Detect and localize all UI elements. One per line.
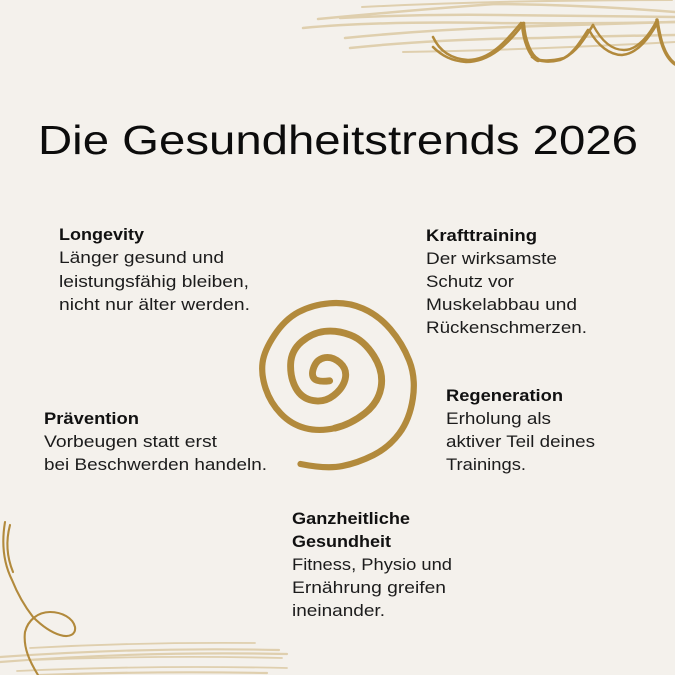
text block: Regeneration: Regeneration	[446, 387, 563, 405]
text block: Krafttraining: Rückenschmerzen.	[426, 319, 587, 337]
text block: Ganzheitliche Gesundheit: ineinander.	[292, 602, 385, 620]
title: Die Gesundheitstrends 2026	[38, 117, 638, 163]
icon: central gold spiral	[262, 303, 414, 467]
text block: Krafttraining	[426, 227, 587, 337]
text block: Ganzheitliche Gesundheit: Ganzheitliche	[292, 510, 410, 528]
text block: Krafttraining: Der wirksamste	[426, 250, 557, 268]
text block: Longevity: Longevity	[59, 226, 145, 244]
top right brush strokes	[303, 0, 675, 52]
text block: Ganzheitliche Gesundheit: Ernährung greifen	[292, 579, 446, 597]
text block: Regeneration: Erholung als	[446, 410, 551, 428]
text block: Longevity	[59, 226, 250, 314]
bottom left gold loop line	[3, 522, 75, 675]
text block: Longevity: nicht nur älter werden.	[59, 296, 250, 314]
text block: Longevity: leistungsfähig bleiben,	[59, 273, 249, 291]
text block: Ganzheitliche Gesundheit: Gesundheit	[292, 533, 392, 551]
bottom left brush strokes	[0, 643, 287, 675]
top right gold scallop line	[433, 20, 675, 64]
text block: Regeneration: Trainings.	[446, 456, 526, 474]
text block: Longevity: Länger gesund und	[59, 249, 224, 267]
text block: Krafttraining: Krafttraining	[426, 227, 537, 245]
text block: Regeneration: aktiver Teil deines	[446, 433, 595, 451]
text block: Prävention: Vorbeugen statt erst	[44, 433, 217, 451]
text block: Ganzheitliche Gesundheit: Fitness, Physio und	[292, 556, 452, 574]
text block: Prävention: Prävention	[44, 410, 139, 428]
text block: Prävention	[44, 410, 267, 474]
text block: Krafttraining: Muskelabbau und	[426, 296, 577, 314]
text block: Regeneration	[446, 387, 595, 474]
text block: Prävention: bei Beschwerden handeln.	[44, 456, 267, 474]
text block: Krafttraining: Schutz vor	[426, 273, 515, 291]
text block: Ganzheitliche Gesundheit	[292, 510, 452, 620]
